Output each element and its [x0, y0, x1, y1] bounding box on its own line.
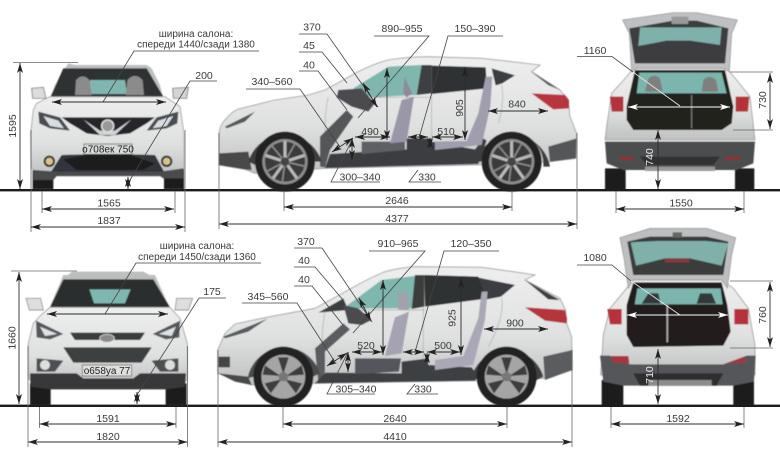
interior width label: ширина салона: — [159, 29, 233, 40]
labels and leaders: front seat: 340–560 — [252, 76, 293, 88]
opening height 730: 730 — [757, 91, 769, 109]
labels and leaders: front seat: 40 — [298, 274, 310, 286]
labels and leaders: rear seat — [403, 238, 548, 396]
labels and leaders: front seat: 890–955 — [382, 23, 423, 35]
labels and leaders: front seat: 370 — [303, 22, 321, 34]
labels and leaders: rear seat: 120–350 — [451, 238, 492, 250]
labels and leaders: front seat: 345–560 — [248, 291, 289, 303]
ground clearance 175: 175 — [203, 286, 221, 298]
wheelbase 2640: 2640 — [383, 413, 407, 425]
length 4410 — [218, 350, 572, 447]
width 1837: 1837 — [97, 215, 121, 227]
ground clearance 200 — [128, 70, 217, 189]
loading height 740 — [644, 130, 658, 189]
ground clearance 175 — [135, 286, 226, 404]
labels and leaders: rear seat: 330 — [414, 384, 432, 396]
ground clearance 200: 200 — [195, 70, 213, 82]
height dimension 1595: 1595 — [7, 114, 19, 138]
panel: Hyundai side view — [218, 236, 572, 447]
licence plate text: о658уа 77 — [84, 366, 131, 377]
height dimension 1660 — [6, 271, 77, 404]
trunk width 1160: 1160 — [584, 45, 606, 57]
illustration: Nissan rear with open tailgate — [605, 13, 755, 190]
illustration: Nissan side cutaway — [219, 57, 577, 192]
panel: Hyundai rear view — [577, 228, 773, 428]
trunk width 1080 — [577, 252, 728, 315]
interior width label — [52, 29, 259, 102]
ground line: bottom row — [0, 405, 780, 407]
width 1820 — [28, 346, 188, 447]
height dimension 1595 — [7, 62, 78, 189]
loading height 710: 710 — [644, 366, 656, 384]
labels and leaders: rear seat: 330 — [418, 172, 436, 184]
track 1550 — [616, 191, 744, 213]
labels and leaders: front seat — [246, 22, 429, 184]
track 1592 — [611, 407, 744, 428]
labels and leaders: front seat: 305–340 — [336, 384, 377, 396]
labels and leaders: front seat: 40 — [298, 255, 310, 267]
panel: Nissan side view — [219, 22, 577, 229]
illustration: Hyundai rear with open tailgate — [600, 228, 756, 406]
track 1550: 1550 — [669, 198, 693, 210]
width 1837 — [31, 130, 185, 232]
labels and leaders: front seat: 520 — [357, 340, 375, 352]
trunk width 1160 — [577, 45, 730, 107]
track 1591: 1591 — [96, 413, 120, 425]
interior width label: ширина салона: — [160, 241, 234, 252]
illustration: Nissan front — [31, 63, 188, 189]
panel: Nissan front view — [7, 29, 259, 232]
loading height 710 — [644, 349, 658, 404]
length 4377: 4377 — [385, 213, 409, 225]
track 1591 — [40, 407, 176, 428]
interior width label: спереди 1450/сзади 1360 — [138, 252, 256, 263]
length 4410: 4410 — [383, 431, 407, 443]
opening height 760 — [730, 281, 773, 348]
opening height 730 — [730, 72, 773, 130]
illustration: Hyundai side cutaway — [218, 267, 572, 407]
labels and leaders: front seat: 40 — [303, 60, 315, 72]
illustration: Hyundai front — [26, 272, 193, 405]
labels and leaders: rear seat — [408, 23, 548, 184]
track 1592: 1592 — [666, 413, 690, 425]
panel: Nissan rear view — [577, 13, 773, 213]
height dimension 1660: 1660 — [6, 326, 18, 350]
labels and leaders: front seat: 45 — [303, 40, 315, 52]
track 1565: 1565 — [97, 198, 121, 210]
wheelbase 2646 — [284, 191, 512, 211]
licence plate text: о708ек 750 — [82, 144, 134, 156]
interior width label — [47, 241, 261, 314]
loading height 740: 740 — [644, 148, 656, 166]
labels and leaders: front seat: 370 — [297, 236, 315, 248]
labels and leaders: front seat — [242, 236, 425, 396]
track 1565 — [42, 191, 175, 213]
labels and leaders: front seat: 490 — [361, 126, 379, 138]
opening height 760: 760 — [757, 306, 769, 324]
panel: Hyundai front view — [6, 241, 261, 447]
labels and leaders: rear seat: 900 — [506, 318, 524, 330]
labels and leaders: front seat: 910–965 — [378, 238, 419, 250]
labels and leaders: rear seat: 500 — [434, 340, 452, 352]
labels and leaders: rear seat: 925 — [446, 309, 458, 327]
wheelbase 2646: 2646 — [385, 195, 409, 207]
labels and leaders: front seat: 300–340 — [340, 172, 381, 184]
labels and leaders: rear seat: 905 — [454, 99, 466, 117]
labels and leaders: rear seat: 840 — [508, 98, 526, 110]
length 4377 — [219, 133, 577, 229]
ground line: top row — [0, 189, 780, 191]
width 1820: 1820 — [96, 431, 120, 443]
labels and leaders: rear seat: 510 — [437, 126, 455, 138]
labels and leaders: rear seat: 150–390 — [455, 23, 496, 35]
wheelbase 2640 — [283, 407, 507, 428]
interior width label: спереди 1440/сзади 1380 — [137, 40, 255, 50]
trunk width 1080: 1080 — [583, 252, 607, 264]
